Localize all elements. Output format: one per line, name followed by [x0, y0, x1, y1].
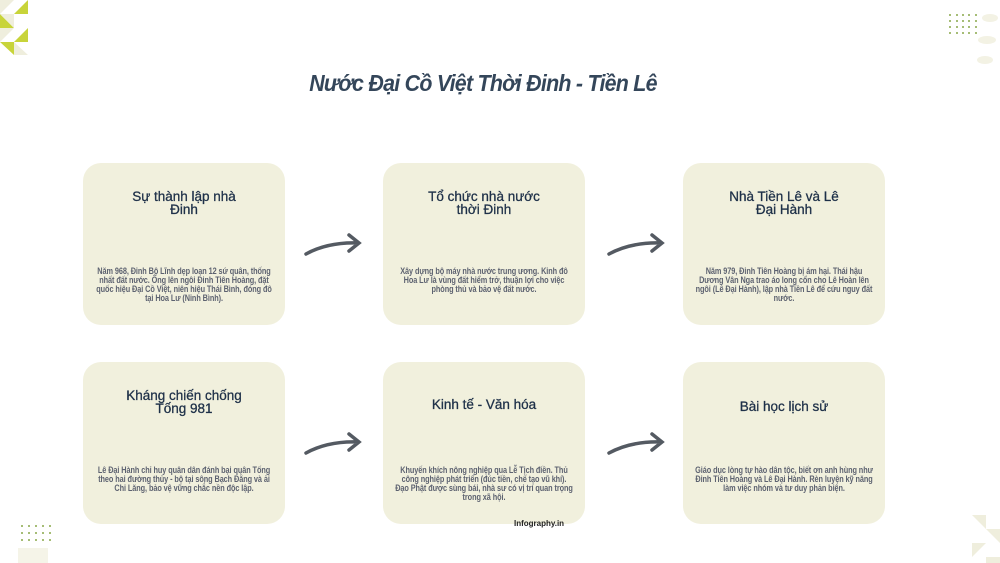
card 6	[683, 362, 885, 524]
watermark: Infography.in	[514, 519, 564, 528]
card 2: Tổ chức nhà nước	[428, 189, 540, 204]
card 3: Nhà Tiền Lê và Lê	[729, 189, 839, 204]
card 5: Kinh tế - Văn hóa	[432, 397, 536, 412]
arrow 2	[607, 233, 665, 256]
arrow 1	[304, 233, 362, 256]
decoration: bottom-right triangles	[972, 515, 1000, 563]
card 3	[683, 163, 885, 325]
decoration: bottom-left dots	[18, 525, 51, 563]
card 3: Đại Hành	[756, 202, 812, 217]
card 4: Lê Đại Hành chỉ huy quân dân đánh bại quân Tống theo hai đường thủy - bộ tại sông Bạch Đằng và ải Chi Lăng, bảo vệ vững chắc nền độc lập.	[98, 464, 270, 493]
card 3: Năm 979, Đinh Tiên Hoàng bị ám hại. Thái hậu Dương Vân Nga trao áo long cổn cho Lê Hoàn lên ngôi (Lê Đại Hành), lập nhà Tiền Lê để cứu nguy đất nước.	[696, 265, 872, 303]
card 5	[383, 362, 585, 524]
card 1: Năm 968, Đinh Bộ Lĩnh dẹp loạn 12 sứ quân, thống nhất đất nước. Ông lên ngôi Đinh Tiên Hoàng, đặt quốc hiệu Đại Cồ Việt, niên hiệu Thái Bình, đóng đô tại Hoa Lư (Ninh Bình).	[96, 265, 272, 303]
card 5: Khuyến khích nông nghiệp qua Lễ Tịch điền. Thủ công nghiệp phát triển (đúc tiền, chế tạo vũ khí). Đạo Phật được sùng bái, nhà sư có vị trí quan trọng trong xã hội.	[395, 464, 573, 502]
card 1: Đinh	[170, 202, 198, 217]
decoration: top-right dots	[949, 14, 998, 64]
title: Nước Đại Cồ Việt Thời Đinh - Tiền Lê	[309, 70, 657, 96]
card 4: Tống 981	[155, 401, 213, 416]
card 1	[83, 163, 285, 325]
card 6: Giáo dục lòng tự hào dân tộc, biết ơn anh hùng như Đinh Tiên Hoàng và Lê Đại Hành. Rèn luyện kỹ năng làm việc nhóm và tư duy phản biện.	[695, 464, 873, 493]
card 4: Kháng chiến chống	[126, 388, 242, 403]
arrow 3	[304, 432, 362, 455]
card 2: Xây dựng bộ máy nhà nước trung ương. Kinh đô Hoa Lư là vùng đất hiểm trở, thuận lợi cho việc phòng thủ và bảo vệ đất nước.	[400, 265, 568, 294]
card 2	[383, 163, 585, 325]
decoration: top-left triangles	[0, 0, 28, 55]
card 4	[83, 362, 285, 524]
card 1: Sự thành lập nhà	[132, 189, 236, 204]
card 6: Bài học lịch sử	[740, 399, 828, 414]
arrow 4	[607, 432, 665, 455]
card 2: thời Đinh	[457, 202, 511, 217]
